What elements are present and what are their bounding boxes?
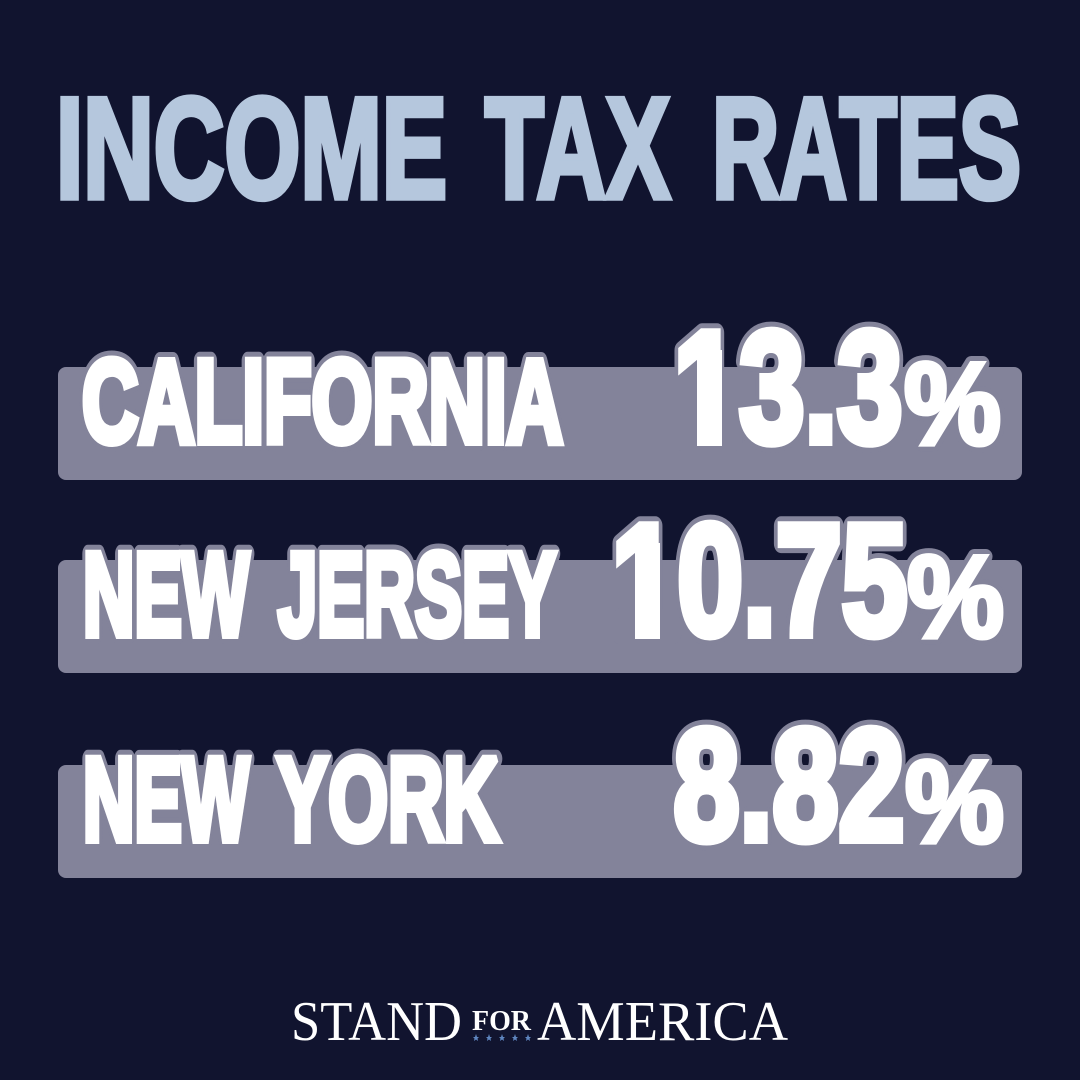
value: 13.3%: % xyxy=(904,338,1001,469)
value: 13.3%: 13.3 xyxy=(674,300,902,476)
value: 13.3%: % xyxy=(904,338,1001,469)
value: 8.82%: % xyxy=(905,736,1004,867)
logo: Stand for America: AMERICA xyxy=(537,991,789,1053)
title: INCOME xyxy=(56,70,447,228)
icon: five stars xyxy=(473,1034,531,1041)
logo: Stand for America xyxy=(291,991,789,1053)
label: California xyxy=(82,336,563,468)
value: 13.3% xyxy=(674,322,1000,448)
logo: Stand for America: STAND xyxy=(291,991,462,1053)
value: 10.75%: 1 xyxy=(612,492,677,668)
value: 13.3%: 3.3 xyxy=(739,300,902,476)
bar: California xyxy=(58,367,1022,480)
value: 13.3%: 1 xyxy=(674,300,739,476)
panel: New York row xyxy=(58,698,1022,878)
value: 10.75%: 0.75 xyxy=(677,492,908,668)
panel: New Jersey row xyxy=(58,514,1022,673)
label: New York: YORK xyxy=(277,734,499,866)
bar: New Jersey xyxy=(58,560,1022,673)
label: New Jersey: NEW xyxy=(83,529,249,661)
label: New York: NEW xyxy=(83,734,249,866)
logo: Stand for America: FOR xyxy=(472,1006,532,1037)
label: New York: YORK xyxy=(277,734,499,866)
label: New York xyxy=(83,734,499,866)
bar: New York xyxy=(58,765,1022,878)
label: California: CALIFORNIA xyxy=(82,336,563,468)
label: New Jersey xyxy=(83,529,556,661)
title: TAX xyxy=(485,70,670,228)
label: California: CALIFORNIA xyxy=(82,336,563,468)
value: 8.82%: % xyxy=(905,736,1004,867)
value: 8.82%: 8.82 xyxy=(674,698,904,874)
label: New York: NEW xyxy=(83,734,249,866)
label: New Jersey: JERSEY xyxy=(278,529,556,661)
value: 10.75%: % xyxy=(907,531,1004,662)
value: 8.82%: 8.82 xyxy=(674,698,904,874)
label: New Jersey: NEW xyxy=(83,529,249,661)
value: 10.75%: 10.75 xyxy=(612,492,908,668)
panel: California row xyxy=(58,322,1022,480)
label: New Jersey: JERSEY xyxy=(278,529,556,661)
title xyxy=(56,70,1021,228)
value: 10.75%: % xyxy=(907,531,1004,662)
